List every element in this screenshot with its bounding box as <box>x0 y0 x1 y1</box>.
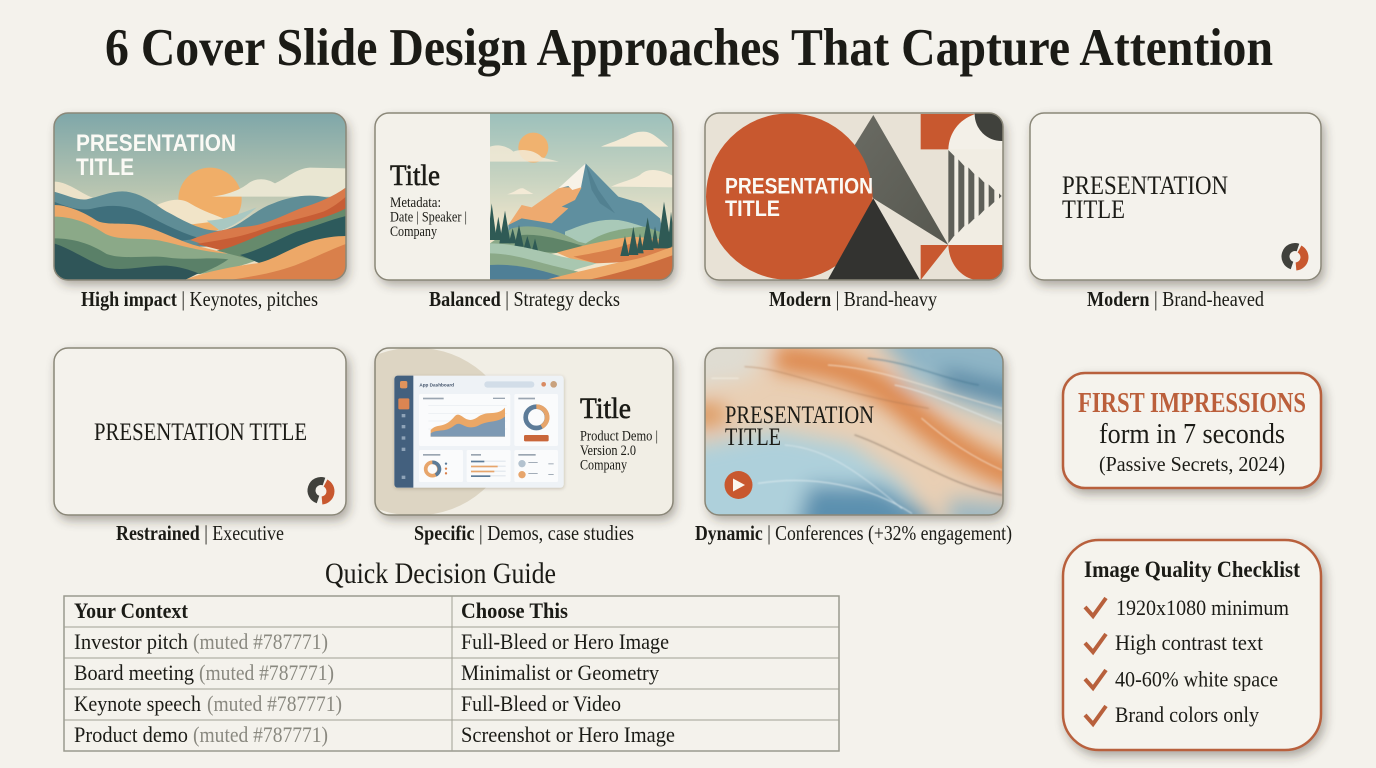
card text: Date | Speaker | <box>390 210 467 226</box>
card title: TITLE <box>76 154 134 181</box>
caption: specific: Specific | Demos, case studies <box>414 521 634 545</box>
caption: modern brand-heaved: Modern | Brand-heaved <box>1087 287 1264 311</box>
card title: PRESENTATION <box>725 174 873 198</box>
panel: video cover <box>675 328 1028 535</box>
card text: Metadata: <box>390 195 441 211</box>
title: 6 Cover Slide Design Approaches That Capture Attention <box>105 19 1273 77</box>
panel: geometric cover <box>702 112 1012 292</box>
checklist item 1: 1920x1080 minimum <box>1116 595 1289 620</box>
dashboard screenshot: App Dashboard <box>419 382 454 387</box>
card title <box>76 130 236 181</box>
callout: first impressions: (Passive Secrets, 2024) <box>1099 452 1285 476</box>
row: product demo: (muted #787771) <box>193 722 328 747</box>
caption: balanced: Balanced | Strategy decks <box>429 287 620 311</box>
row: keynote speech: Full-Bleed or Video <box>461 691 621 716</box>
card title <box>725 174 873 221</box>
row: product demo: Screenshot or Hero Image <box>461 722 675 747</box>
card text: Company <box>390 224 437 240</box>
card text: Version 2.0 <box>580 443 636 459</box>
row: keynote speech <box>74 691 621 716</box>
card text: Product Demo | <box>580 428 658 444</box>
table: quick decision guide <box>64 596 839 751</box>
icon: play button <box>724 471 752 499</box>
card title <box>725 402 874 451</box>
card title: PRESENTATION TITLE <box>94 419 307 446</box>
card text <box>390 159 467 240</box>
card title: PRESENTATION <box>76 130 236 157</box>
panel: restrained cover with logo <box>54 348 346 515</box>
card title: TITLE <box>725 196 780 221</box>
row: investor pitch <box>74 629 669 654</box>
row: board meeting: Minimalist or Geometry <box>461 660 660 685</box>
icon: logo <box>312 481 330 500</box>
row: board meeting: Board meeting <box>74 660 194 685</box>
card text: Title <box>580 392 631 425</box>
caption: high impact: High impact | Keynotes, pitches <box>81 287 318 311</box>
card text <box>580 392 658 474</box>
card title: TITLE <box>1062 195 1125 224</box>
heading: quick decision guide: Quick Decision Guide <box>325 557 556 590</box>
row: board meeting: (muted #787771) <box>199 660 334 685</box>
card title: PRESENTATION <box>1062 171 1228 200</box>
caption: dynamic: Dynamic | Conferences (+32% engagement) <box>695 521 1012 545</box>
table header: Your Context <box>74 598 188 623</box>
panel: image quality checklist <box>1063 540 1321 750</box>
panel: screenshot cover <box>320 348 673 516</box>
card text: Company <box>580 458 627 474</box>
checklist item 4: Brand colors only <box>1115 702 1260 727</box>
checklist item 3: 40-60% white space <box>1115 666 1278 692</box>
icon: logo <box>1286 247 1304 266</box>
card title: PRESENTATION <box>725 402 874 429</box>
callout: first impressions: form in 7 seconds <box>1099 418 1285 450</box>
table header: Choose This <box>461 598 568 623</box>
row: product demo: Product demo <box>74 722 188 747</box>
caption: restrained: Restrained | Executive <box>116 521 284 545</box>
callout: first impressions <box>1063 373 1321 488</box>
row: investor pitch: (muted #787771) <box>193 629 328 654</box>
dashboard screenshot <box>394 376 564 488</box>
card text: Title <box>390 159 440 192</box>
checklist item 2: High contrast text <box>1115 630 1264 655</box>
row: product demo <box>74 722 675 747</box>
panel: full-bleed image cover <box>54 113 346 282</box>
row: investor pitch: Investor pitch <box>74 629 188 654</box>
caption: modern brand-heavy: Modern | Brand-heavy <box>769 287 937 311</box>
panel: hero image split cover <box>372 110 676 283</box>
table header <box>74 598 568 623</box>
row: board meeting <box>74 660 660 685</box>
row: keynote speech: Keynote speech <box>74 691 201 716</box>
checklist heading: Image Quality Checklist <box>1084 557 1300 582</box>
row: investor pitch: Full-Bleed or Hero Image <box>461 629 669 654</box>
row: keynote speech: (muted #787771) <box>207 691 342 716</box>
card title <box>1062 171 1228 224</box>
callout: first impressions: FIRST IMPRESSIONS <box>1078 388 1306 419</box>
card title: TITLE <box>725 424 781 451</box>
panel: minimalist cover with logo <box>1030 113 1321 280</box>
